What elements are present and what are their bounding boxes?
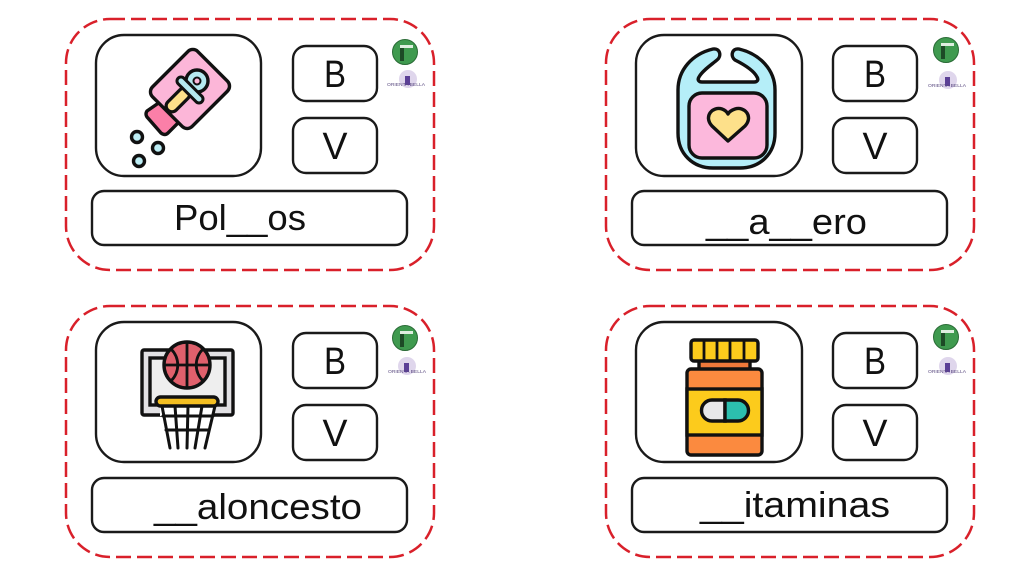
dashed card border <box>66 306 434 557</box>
option box V <box>833 118 917 173</box>
icon: vitamin bottle <box>687 340 762 455</box>
image frame <box>96 322 261 462</box>
logo: green badge <box>934 324 958 350</box>
word box <box>92 478 407 532</box>
option box B <box>293 333 377 388</box>
image frame <box>96 35 261 176</box>
option box V: V <box>862 413 888 455</box>
logo: purple tree: ORIENTA BELLA <box>387 82 425 87</box>
option box V: V <box>862 126 888 168</box>
logo: purple tree <box>388 357 426 375</box>
panel: card Baloncesto <box>66 306 434 557</box>
option box B <box>833 333 917 388</box>
option box B: B <box>864 341 886 383</box>
word box: __aloncesto <box>153 486 362 527</box>
logo: purple tree <box>387 70 425 88</box>
option box B <box>833 46 917 101</box>
dashed card border <box>606 306 974 557</box>
option box B: B <box>324 54 346 96</box>
logo: green badge <box>392 40 418 64</box>
logo: green badge <box>392 326 418 350</box>
word box: __a__ero <box>705 201 867 242</box>
icon: baby powder bottle <box>132 47 232 166</box>
logo: purple tree: ORIENTA BELLA <box>928 369 966 374</box>
word box <box>92 191 407 245</box>
icon: basketball hoop <box>142 342 233 448</box>
image frame <box>636 35 802 176</box>
word box <box>632 191 947 245</box>
logo: purple tree: ORIENTA BELLA <box>388 369 426 374</box>
option box V: V <box>322 413 348 455</box>
option box B: B <box>324 341 346 383</box>
dashed card border <box>606 19 974 270</box>
image frame <box>636 322 802 462</box>
dashed card border <box>66 19 434 270</box>
word box: Pol__os <box>174 197 306 238</box>
logo: purple tree <box>928 357 966 375</box>
word box: __itaminas <box>699 484 890 525</box>
option box V <box>293 405 377 460</box>
panel: card Polvos <box>66 19 434 270</box>
option box V <box>293 118 377 173</box>
option box B: B <box>864 54 886 96</box>
option box B <box>293 46 377 101</box>
icon: bib <box>678 49 775 168</box>
logo: purple tree <box>928 71 966 89</box>
option box V: V <box>322 126 348 168</box>
logo: purple tree: ORIENTA BELLA <box>928 83 966 88</box>
word box <box>632 478 947 532</box>
logo: green badge <box>934 38 958 62</box>
panel: card Babero <box>606 19 974 270</box>
panel: card Vitaminas <box>606 306 974 557</box>
option box V <box>833 405 917 460</box>
